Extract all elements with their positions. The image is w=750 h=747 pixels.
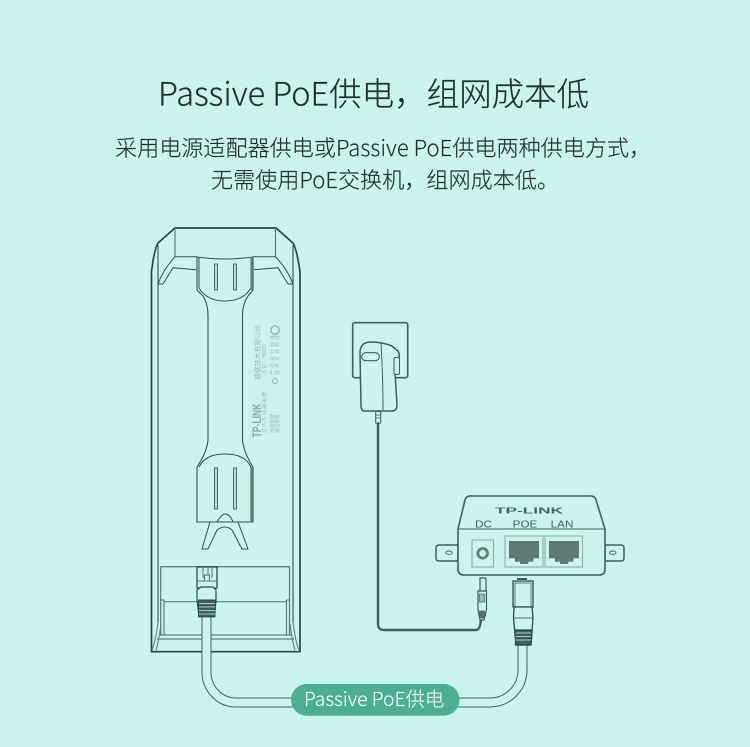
device: outdoor CPE back view xyxy=(152,228,300,652)
lower mounting clip xyxy=(199,454,252,549)
injector port labels: DC xyxy=(475,520,492,531)
title: Passive PoE供电，组网成本低 xyxy=(158,68,589,116)
device label text: 电源参数 xyxy=(269,414,276,433)
device label text: 技术支持热线 xyxy=(274,335,281,375)
injector port labels xyxy=(475,520,573,531)
device label text: 5300003 xyxy=(261,344,268,358)
DC barrel plug xyxy=(478,578,486,620)
RJ45 plug in device xyxy=(197,567,217,617)
power adapter xyxy=(360,342,400,423)
injector port labels: LAN xyxy=(551,520,573,531)
device label text: 室内有线路由器 xyxy=(261,392,268,433)
POE port xyxy=(505,536,543,567)
PoE injector xyxy=(436,496,624,575)
device label text xyxy=(250,325,281,438)
description text: 采用电源适配器供电或Passive PoE供电两种供电方式， xyxy=(115,131,651,163)
bottom connector bay xyxy=(152,567,299,650)
upper mounting clip xyxy=(197,257,253,522)
description text: 无需使用PoE交换机，组网成本低。 xyxy=(211,163,559,195)
injector body xyxy=(458,496,605,575)
wall socket xyxy=(353,323,408,378)
injector ears xyxy=(436,545,624,561)
description text xyxy=(115,131,651,195)
device label text: 产品执行标准 xyxy=(269,335,276,375)
device label text: (方位) xyxy=(261,362,268,376)
DC port xyxy=(472,540,494,567)
cable: PoE ethernet xyxy=(202,617,527,707)
label pill: Passive PoE power: Passive PoE供电 xyxy=(304,684,444,712)
LAN port xyxy=(545,536,582,567)
device label text: 普联技术有限公司 xyxy=(253,325,263,380)
RJ45 plug to injector xyxy=(513,579,533,645)
injector logo: TP-LINK xyxy=(495,506,563,516)
device label text: TP-LINK xyxy=(250,403,264,438)
injector port labels: POE xyxy=(513,520,538,531)
device label text: 输出参数 xyxy=(274,414,281,433)
device outer shell xyxy=(152,228,300,652)
DC cable xyxy=(378,423,481,630)
